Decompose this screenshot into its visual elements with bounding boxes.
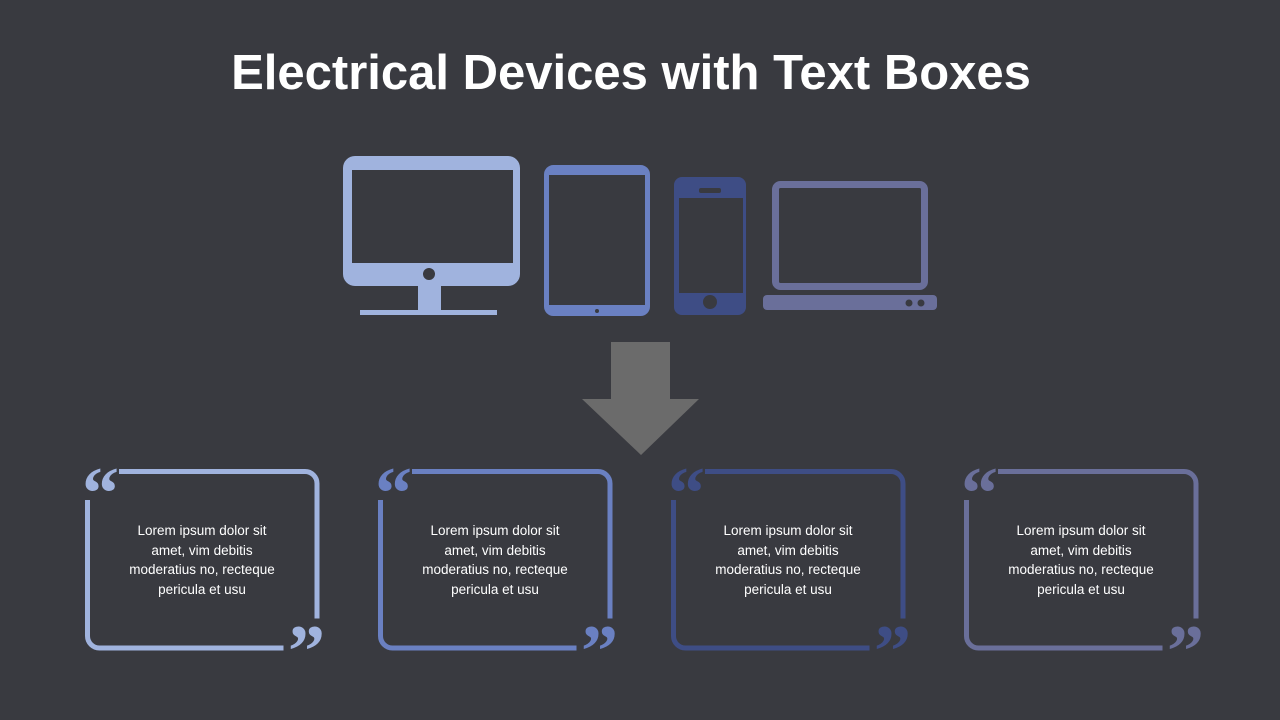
text box 2 [422,523,568,597]
text box 3: Lorem ipsum dolor sit [723,523,853,538]
text box 1: amet, vim debitis [151,542,253,558]
box 1 frame: ” [288,611,325,693]
box 4 frame [961,453,1204,693]
text box 3: moderatius no, recteque [715,562,861,577]
box 2 frame: ” [581,611,618,693]
text box 2: amet, vim debitis [444,542,546,558]
text box 1: Lorem ipsum dolor sit [137,523,267,538]
text box 4 [1008,523,1154,597]
text box 2: Lorem ipsum dolor sit [430,523,560,538]
text box 3: pericula et usu [744,582,832,596]
box 1 frame [82,453,325,693]
text box 3 [715,523,861,597]
text box 2: moderatius no, recteque [422,562,568,577]
box 2 frame: “ [375,453,412,535]
box 3 frame: “ [668,453,705,535]
text box 1: moderatius no, recteque [129,562,275,577]
icon: monitor [343,156,520,315]
text box 1: pericula et usu [158,582,246,596]
box 1 frame: “ [82,453,119,535]
icon: laptop [763,184,937,310]
text box 4: Lorem ipsum dolor sit [1016,523,1146,538]
arrow [582,342,699,455]
text box 3: amet, vim debitis [737,542,839,558]
box 2 frame [375,453,618,693]
icon: tablet [546,167,648,314]
text box 4: moderatius no, recteque [1008,562,1154,577]
text box 1 [129,523,275,597]
text box 4: pericula et usu [1037,582,1125,596]
text box 4: amet, vim debitis [1030,542,1132,558]
title: Electrical Devices with Text Boxes [231,46,1031,100]
icon: phone [674,177,746,315]
text box 2: pericula et usu [451,582,539,596]
box 4 frame: ” [1167,611,1204,693]
box 3 frame: ” [874,611,911,693]
box 3 frame [668,453,911,693]
box 4 frame: “ [961,453,998,535]
